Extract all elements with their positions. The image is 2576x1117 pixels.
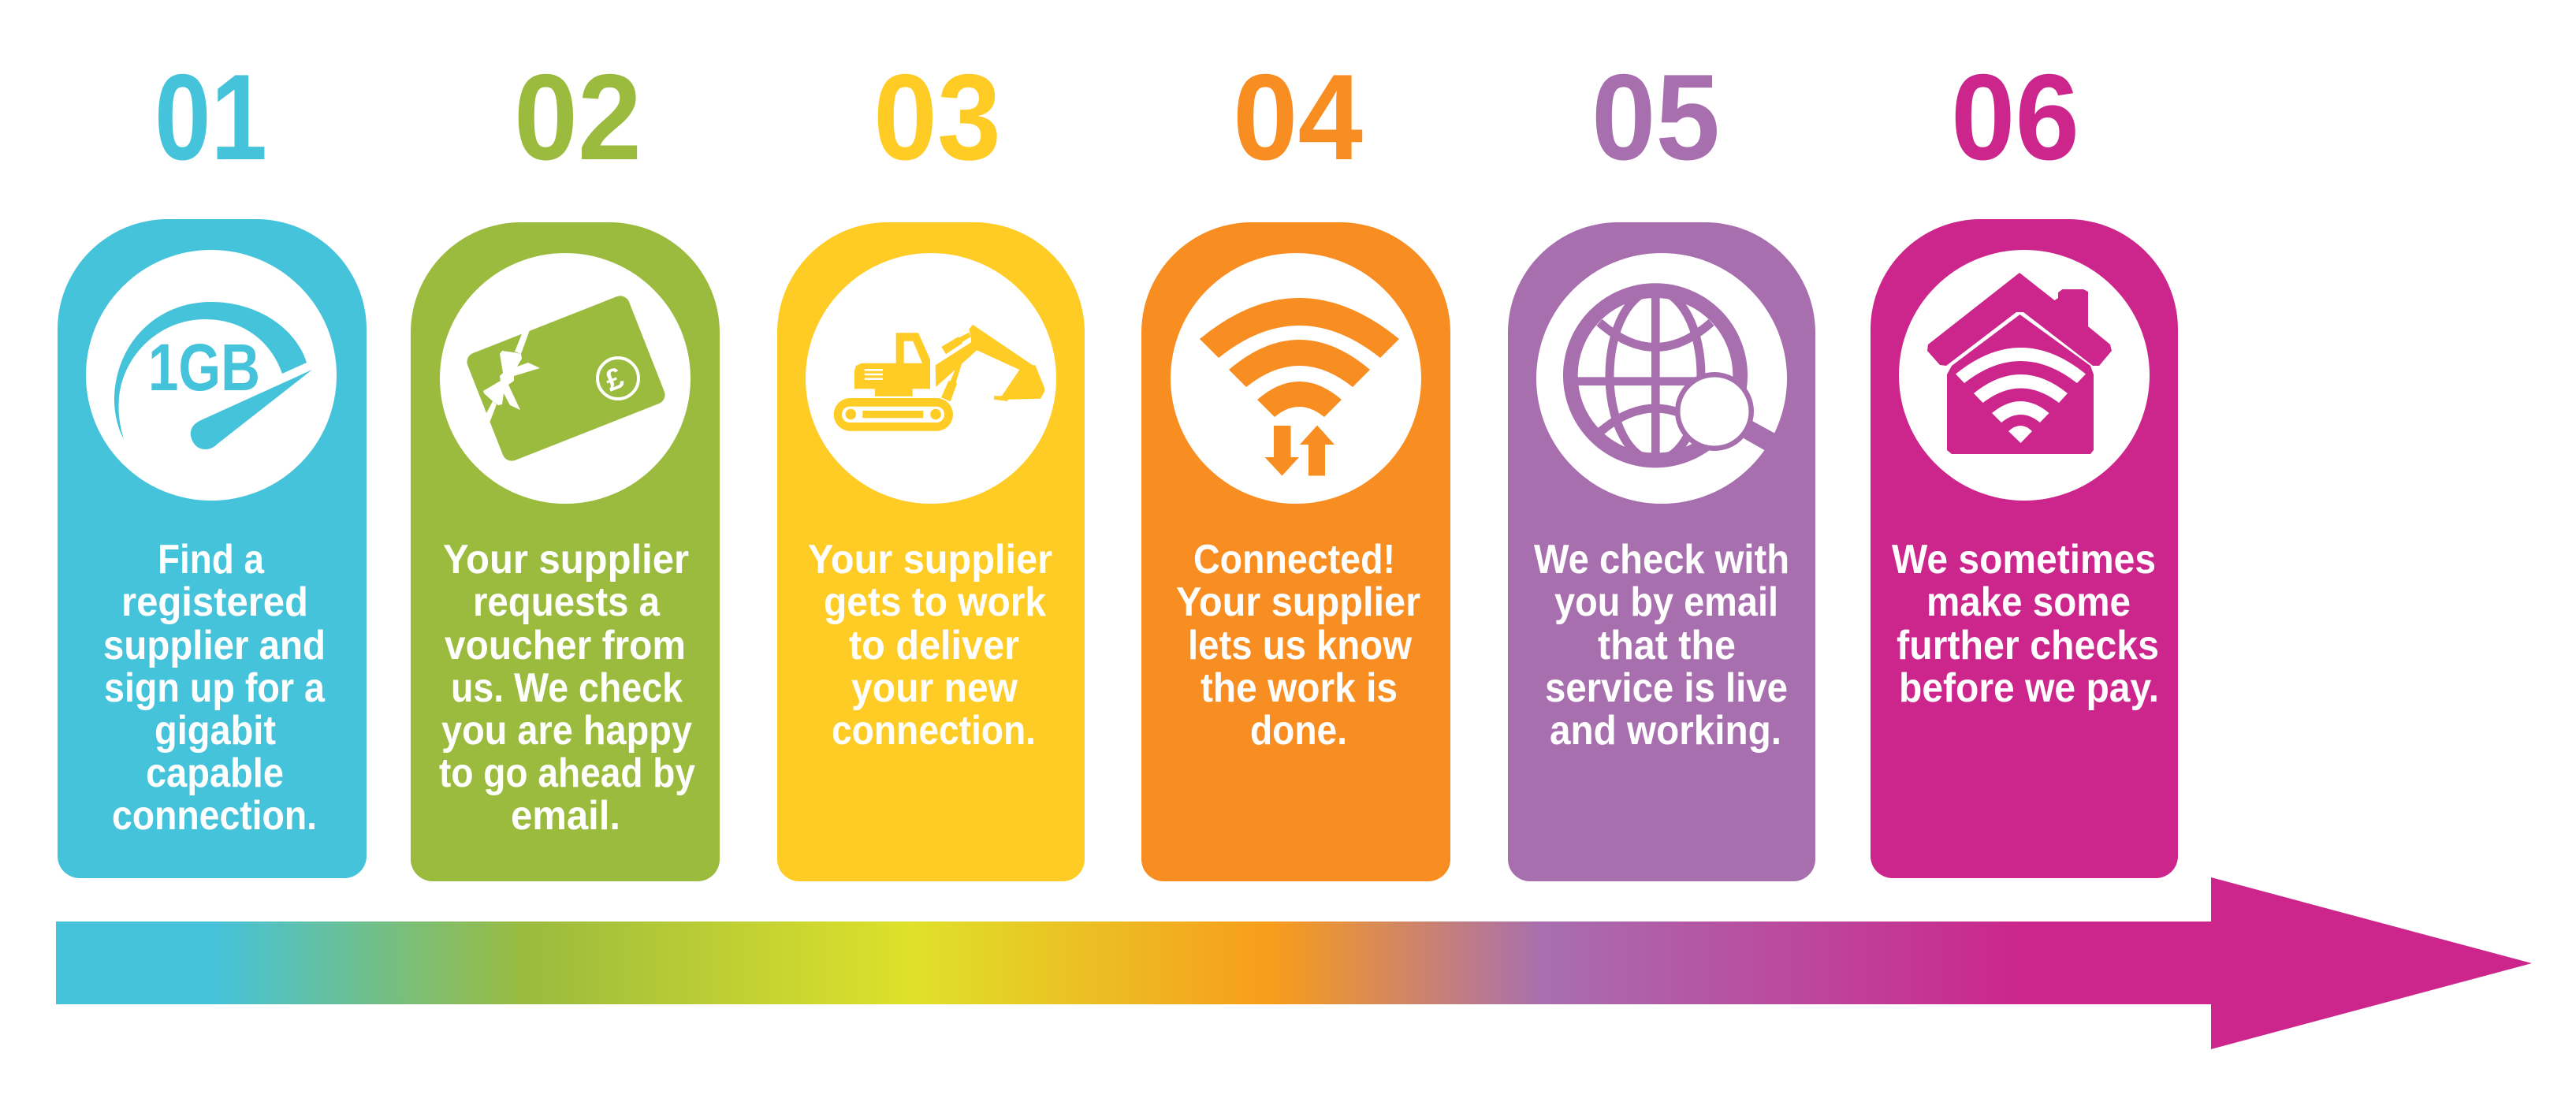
text: step 6 description: [1892, 537, 2159, 711]
icon: 1GB speedometer: 1GB: [148, 330, 260, 404]
text: step 3 description: your new: [851, 665, 1018, 711]
icon: house with wifi: [1899, 250, 2150, 501]
icon: gift voucher: £: [601, 361, 628, 398]
text: step 4 description: done.: [1250, 708, 1347, 754]
text: step 1 description: supplier and: [103, 623, 326, 668]
text: step 6 description: further checks: [1897, 623, 2159, 668]
panel: step 5: [1508, 49, 1815, 881]
text: step 2 description: requests a: [473, 579, 661, 625]
card background: [777, 222, 1085, 881]
icon: 1GB speedometer: [86, 250, 337, 501]
number 01: 01: [154, 49, 267, 185]
text: step 5 description: We check with: [1534, 537, 1789, 583]
text: step 2 description: email.: [511, 793, 620, 839]
number 02: 02: [514, 49, 642, 185]
text: step 3 description: gets to work: [824, 579, 1046, 625]
text: step 2 description: Your supplier: [443, 537, 689, 583]
text: step 5 description: you by email: [1554, 579, 1778, 625]
icon: excavator: [806, 253, 1056, 504]
text: step 5 description: that the: [1598, 623, 1736, 668]
number 03: 03: [873, 49, 1001, 185]
card background: [58, 219, 367, 878]
text: step 6 description: before we pay.: [1899, 665, 2159, 711]
text: step 1 description: capable: [146, 750, 284, 796]
card background: [1141, 222, 1450, 881]
text: step 2 description: [439, 537, 695, 839]
card background: [411, 222, 720, 881]
text: step 3 description: [808, 537, 1052, 754]
text: step 3 description: connection.: [832, 708, 1036, 754]
text: step 5 description: service is live: [1545, 665, 1788, 711]
card background: [1508, 222, 1815, 881]
panel: step 4: [1141, 49, 1450, 881]
arrow: gradient timeline: [56, 877, 2532, 1049]
text: step 1 description: connection.: [112, 793, 317, 839]
text: step 2 description: to go ahead by: [439, 750, 695, 796]
text: step 2 description: us. We check: [451, 665, 683, 711]
text: step 3 description: to deliver: [849, 623, 1019, 668]
text: step 2 description: voucher from: [445, 623, 686, 668]
number 06: 06: [1951, 49, 2079, 185]
text: step 4 description: Your supplier: [1176, 579, 1420, 625]
number 05: 05: [1591, 49, 1720, 185]
text: step 1 description: registered: [121, 579, 308, 625]
text: step 4 description: lets us know: [1188, 623, 1413, 668]
panel: step 2: [411, 49, 720, 881]
text: step 1 description: [103, 537, 326, 839]
number 04: 04: [1233, 49, 1363, 185]
card background: [1871, 219, 2178, 878]
text: step 6 description: make some: [1926, 579, 2131, 625]
icon: globe with magnifier: [1536, 253, 1787, 504]
text: step 2 description: you are happy: [441, 708, 692, 754]
text: step 4 description: [1176, 537, 1420, 754]
text: step 4 description: the work is: [1201, 665, 1398, 711]
text: step 4 description: Connected!: [1193, 537, 1395, 583]
panel: step 3: [777, 49, 1085, 881]
text: step 3 description: Your supplier: [808, 537, 1052, 583]
text: step 6 description: We sometimes: [1892, 537, 2156, 583]
icon: wifi with data arrows: [1171, 253, 1421, 504]
text: step 1 description: gigabit: [154, 708, 276, 754]
text: step 5 description: [1534, 537, 1789, 754]
text: step 5 description: and working.: [1550, 708, 1781, 754]
panel: step 6: [1871, 49, 2178, 878]
text: step 1 description: sign up for a: [104, 665, 326, 711]
panel: step 1: [58, 49, 367, 878]
text: step 1 description: Find a: [158, 537, 265, 583]
icon: gift voucher: [440, 253, 691, 504]
